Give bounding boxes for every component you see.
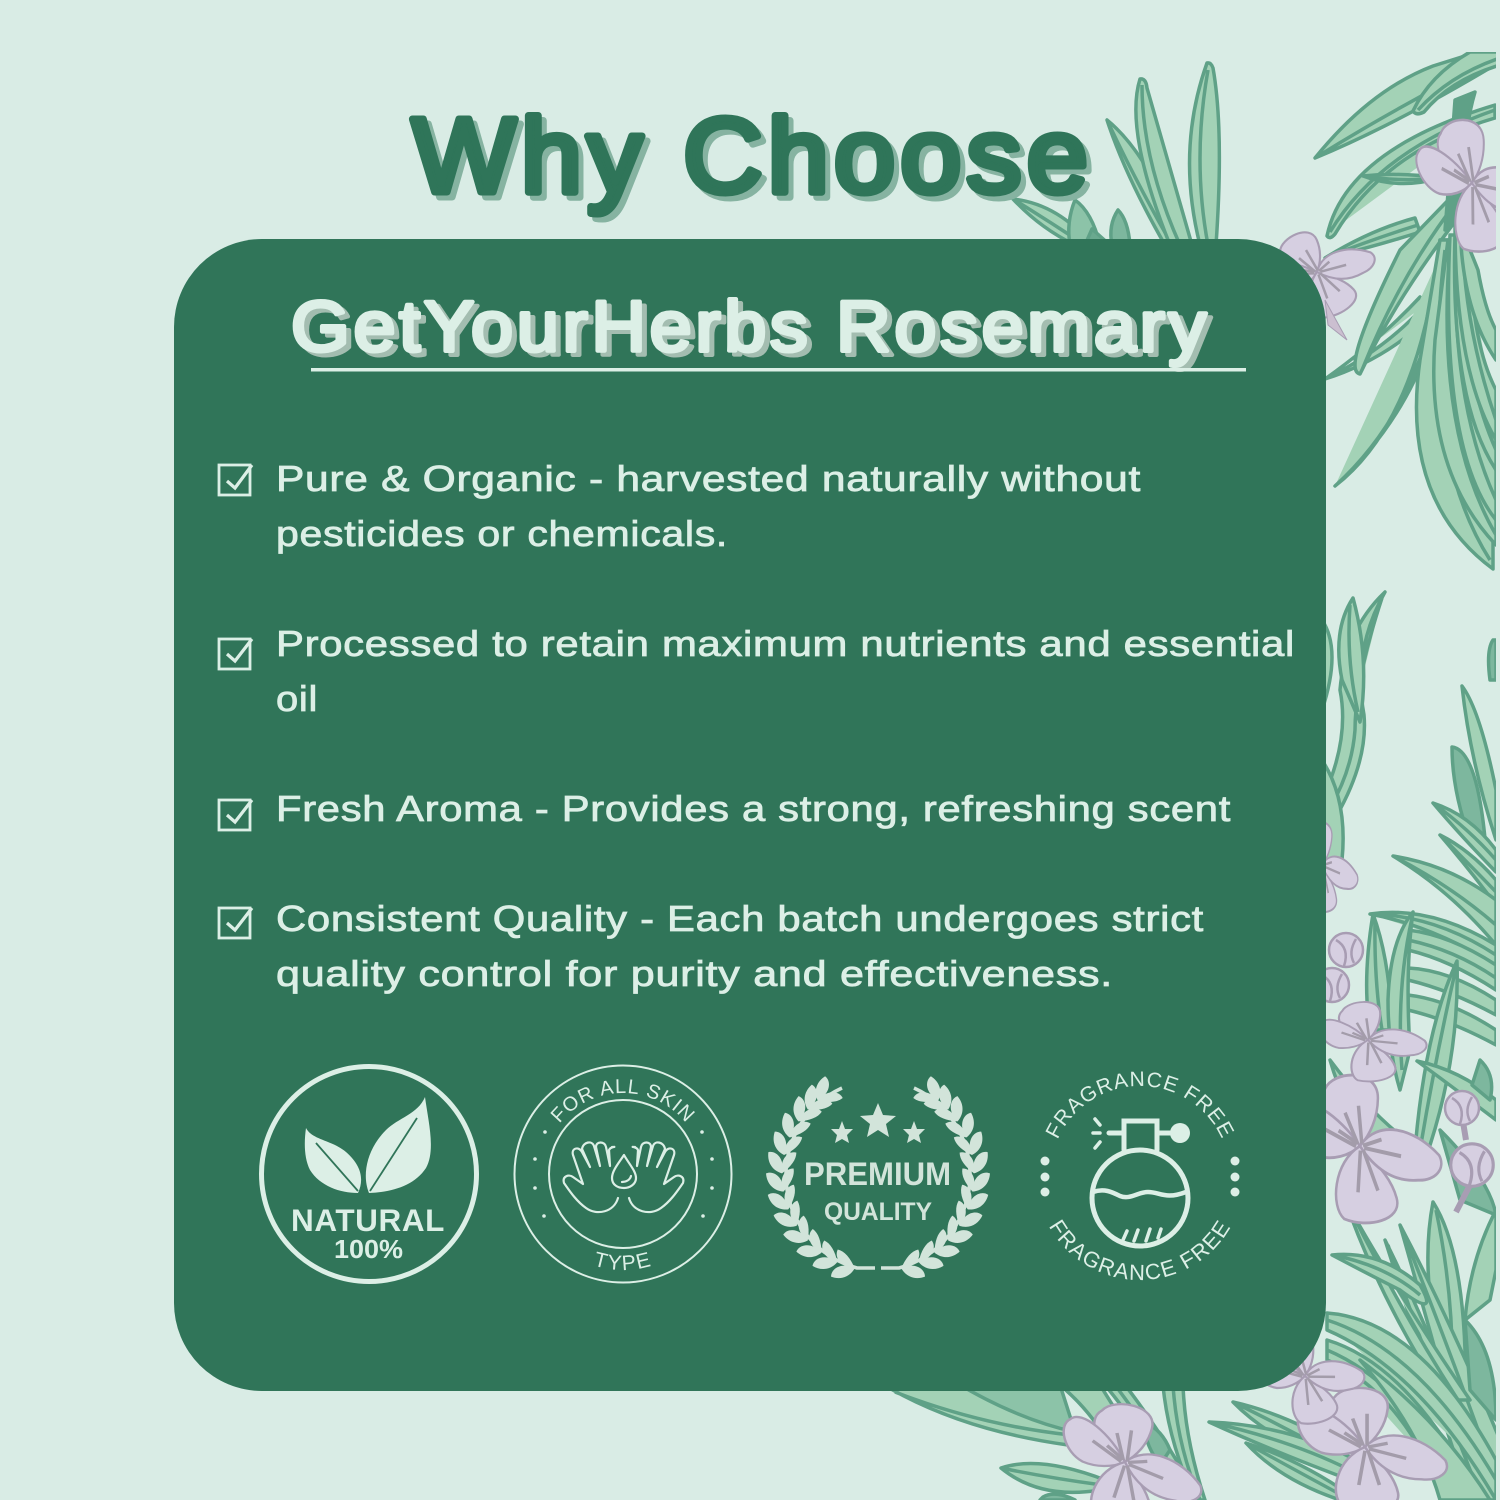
badge: for all skin type (514, 1064, 732, 1284)
benefit 1: pesticides or chemicals. (276, 513, 728, 554)
decorative dots (533, 1130, 714, 1218)
rosemary illustration (884, 45, 1500, 1500)
subtitle underline (311, 368, 1246, 372)
icon: stars (831, 1103, 925, 1143)
leaves: sprig behind title (1013, 63, 1219, 245)
icon: laurel left (766, 1076, 875, 1282)
badge: for all skin type: FOR ALL SKIN (550, 1079, 695, 1122)
badge: for all skin type: TYPE (596, 1252, 651, 1270)
icon: checkbox 1 (219, 465, 252, 495)
title: Why Choose (417, 102, 1098, 220)
benefit 4 (219, 898, 1204, 994)
badge: premium quality: PREMIUM (804, 1156, 951, 1192)
badge: natural 100% (262, 1066, 476, 1282)
icon: leaves (305, 1097, 431, 1193)
badge: fragrance free: FRAGRANCE FREE (1046, 1072, 1234, 1138)
benefit 1 (219, 458, 1141, 554)
panel (174, 239, 1326, 1391)
decorative dots (1040, 1156, 1240, 1196)
benefit 2: Processed to retain maximum nutrients and essential (276, 623, 1295, 664)
title: Why Choose (412, 97, 1093, 215)
icon: checkbox 2 (219, 639, 252, 669)
buds (1315, 933, 1493, 1212)
benefit 2 (219, 623, 1295, 719)
flower: upper small (1279, 231, 1376, 318)
subtitle: GetYourHerbs Rosemary (291, 288, 1210, 367)
benefit 2: oil (276, 678, 318, 719)
flower: left edge (1326, 822, 1358, 913)
benefit 3: Fresh Aroma - Provides a strong, refreshing scent (276, 788, 1231, 829)
flower: bottom left (1062, 1403, 1202, 1500)
leaves: upper right sprig (1315, 45, 1500, 569)
benefit 1: Pure & Organic - harvested naturally without (276, 458, 1141, 499)
leaves: bottom sprig (884, 1385, 1205, 1500)
icon: hands and drop (564, 1142, 683, 1212)
subtitle: GetYourHerbs Rosemary (296, 292, 1215, 371)
icon: checkbox 3 (219, 800, 252, 830)
icon: perfume bottle (1092, 1119, 1190, 1246)
badge: natural 100%: NATURAL (291, 1202, 445, 1238)
flower stem (1325, 300, 1347, 340)
icon: laurel right (881, 1076, 990, 1282)
flower: middle large (1326, 1074, 1443, 1224)
badge: premium quality (766, 1076, 990, 1282)
badge: natural 100%: 100% (334, 1234, 403, 1264)
badge: fragrance free: FRAGRANCE FREE (1050, 1219, 1230, 1280)
flower: middle small (1326, 1001, 1428, 1082)
badge: fragrance free (1040, 1072, 1240, 1280)
badge: premium quality: QUALITY (824, 1198, 932, 1226)
flower: lower small (1267, 1346, 1366, 1425)
flower: bottom right (1298, 1388, 1447, 1500)
benefit 4: Consistent Quality - Each batch undergoes strict (276, 898, 1204, 939)
benefit 4: quality control for purity and effectiveness. (276, 953, 1113, 994)
leaves: lower right sprig (1209, 592, 1500, 1500)
flower: upper right large (1415, 118, 1496, 253)
icon: checkbox 4 (219, 908, 252, 938)
